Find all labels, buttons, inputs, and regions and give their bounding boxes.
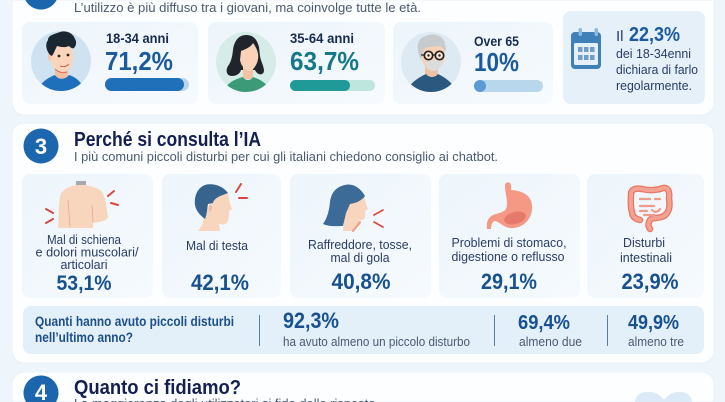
label: stomach problems (452, 235, 566, 264)
progress bar 10% (474, 80, 543, 92)
callout: 22,3% regular use (563, 11, 705, 104)
stat: 69,4% (518, 312, 582, 349)
stat: 49,9%: almeno tre (628, 334, 684, 349)
card: back pain (22, 174, 153, 298)
section number badge 3: 3 (35, 134, 47, 159)
value: 63,7%: 63,7% (290, 46, 359, 76)
section 2 subtitle: L’utilizzo è più diffuso tra i giovani, ma coinvolge tutte le età. (74, 0, 421, 15)
value: 10%: 10% (474, 47, 519, 77)
stat: 49,9% (628, 312, 684, 349)
text: 22,3% callout: regolarmente. (616, 78, 692, 93)
text: 22,3% callout: dichiara di farlo (616, 62, 698, 77)
text: 22,3% callout: 22,3% (629, 24, 680, 46)
label: 35-64 anni: 35-64 anni (290, 30, 354, 46)
stat: 69,4%: 69,4% (518, 312, 570, 334)
icon: stomach (487, 182, 532, 229)
section number badge 3 (24, 128, 58, 164)
section number badge 2 (25, 0, 57, 10)
label: back pain: e dolori muscolari/ (36, 244, 139, 260)
value: 40,8%: 40,8% (332, 269, 390, 294)
section 3 heading: Perché si consulta l’IA (74, 129, 261, 151)
label: headache: Mal di testa (186, 238, 249, 253)
label: 18-34 anni: 18-34 anni (106, 30, 169, 46)
card: 35-64 anni (208, 22, 385, 104)
label: stomach problems: Problemi di stomaco, (452, 235, 566, 250)
stat strip: people with minor ailments (23, 306, 704, 354)
text: 22,3% callout (616, 24, 698, 93)
section 3 subtitle: I più comuni piccoli disturbi per cui gli italiani chiedono consiglio ai chatbot. (74, 149, 498, 164)
strip question (35, 314, 234, 345)
text: 22,3% callout: dei 18-34enni (616, 46, 691, 61)
value: 42,1%: 42,1% (191, 270, 249, 295)
icon: woman coughing (323, 184, 383, 231)
label: intestinal problems: Disturbi (623, 235, 665, 250)
label: intestinal problems (620, 235, 672, 265)
icon: back with pain marks (46, 181, 118, 228)
value: 71,2%: 71,2% (105, 46, 173, 76)
card: 18-34 anni (22, 22, 198, 104)
strip question: nell’ultimo anno? (35, 330, 133, 345)
panel: section 2 age groups (12, 0, 714, 115)
icon: calendar (571, 28, 601, 69)
strip question: Quanti hanno avuto piccoli disturbi (35, 314, 234, 329)
value: 29,1%: 29,1% (481, 269, 537, 294)
icon: elderly man avatar (401, 32, 461, 96)
stat: 92,3% (283, 308, 470, 349)
icon: heart (635, 392, 692, 402)
value: 53,1%: 53,1% (56, 272, 112, 295)
stat: 92,3%: 92,3% (283, 308, 339, 333)
panel: section 4 trust (12, 372, 714, 402)
card: stomach problems (439, 174, 580, 298)
label: back pain (36, 232, 139, 272)
label: cold, cough, sore throat: mal di gola (330, 250, 390, 265)
label: back pain: Mal di schiena (47, 232, 122, 247)
card: intestinal problems (587, 174, 704, 298)
card: cold, cough, sore throat (290, 174, 431, 298)
icon: woman avatar (216, 32, 276, 96)
label: stomach problems: digestione o reflusso (452, 249, 564, 264)
value: 23,9%: 23,9% (622, 269, 678, 294)
progress bar 71,2% (105, 78, 189, 91)
icon: intestines (631, 188, 669, 229)
label: intestinal problems: intestinali (620, 250, 672, 265)
label: cold, cough, sore throat: Raffreddore, tosse, (308, 237, 412, 252)
label: cold, cough, sore throat (308, 237, 412, 265)
section number badge 4 (24, 375, 59, 402)
text: 22,3% callout: Il (616, 28, 624, 45)
section 4 heading: Quanto ci fidiamo? (74, 377, 241, 399)
stat: 92,3%: ha avuto almeno un piccolo disturbo (283, 334, 470, 349)
panel: section 3 why people consult AI (12, 123, 714, 363)
progress bar 63,7% (290, 80, 375, 91)
label: back pain: articolari (60, 257, 108, 272)
card: headache (162, 174, 281, 298)
icon: young man avatar (31, 31, 91, 95)
label: over 65: Over 65 (474, 33, 519, 49)
card: over 65 (393, 22, 553, 104)
icon: head with pain marks (195, 184, 247, 231)
stat: 69,4%: almeno due (519, 334, 582, 349)
stat: 49,9%: 49,9% (628, 312, 679, 334)
